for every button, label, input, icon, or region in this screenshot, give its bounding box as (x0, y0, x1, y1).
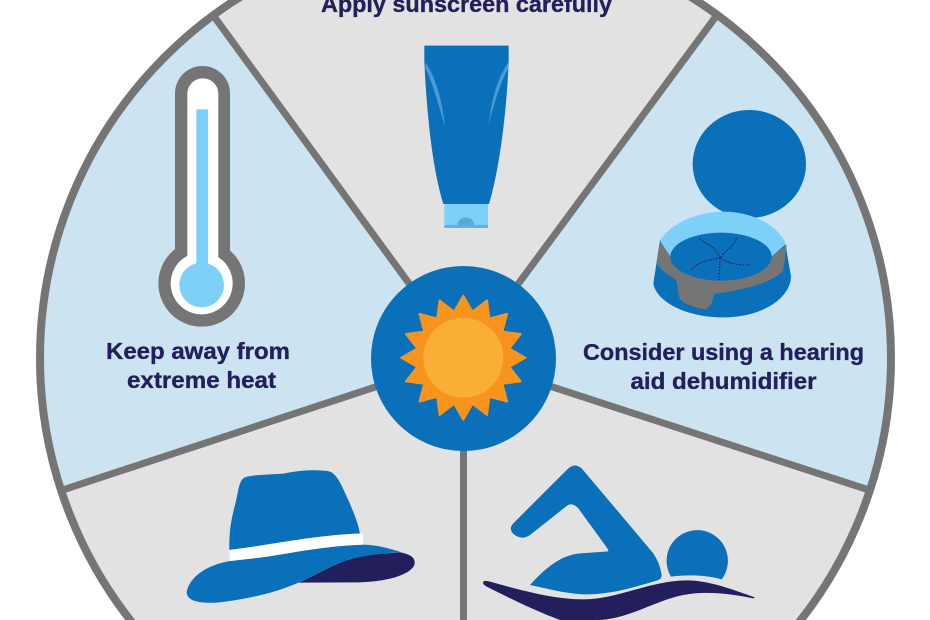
text: keep away from extreme heat: Keep away from (106, 338, 290, 364)
panel: sun hat (61, 358, 466, 620)
center sun badge (371, 266, 556, 451)
icon: sun hat (187, 470, 415, 603)
icon: sunscreen tube (424, 46, 509, 228)
panel: swimming (466, 358, 870, 620)
icon: sun disc (423, 318, 503, 398)
text: consider using a hearing aid dehumidifier: aid dehumidifier (630, 368, 817, 394)
text: keep away from extreme heat: extreme heat (127, 367, 276, 393)
panel: hearing aid dehumidifier (466, 14, 891, 490)
text: consider using a hearing aid dehumidifier (583, 339, 864, 394)
icon: dehumidifier (653, 110, 806, 317)
icon: thermometer (158, 66, 245, 327)
panel: extreme heat (40, 14, 466, 490)
text: consider using a hearing aid dehumidifier: Consider using a hearing (583, 339, 864, 365)
icon: swimmer (483, 465, 755, 620)
text: keep away from extreme heat (106, 338, 290, 393)
icon: sun rays (401, 296, 525, 420)
